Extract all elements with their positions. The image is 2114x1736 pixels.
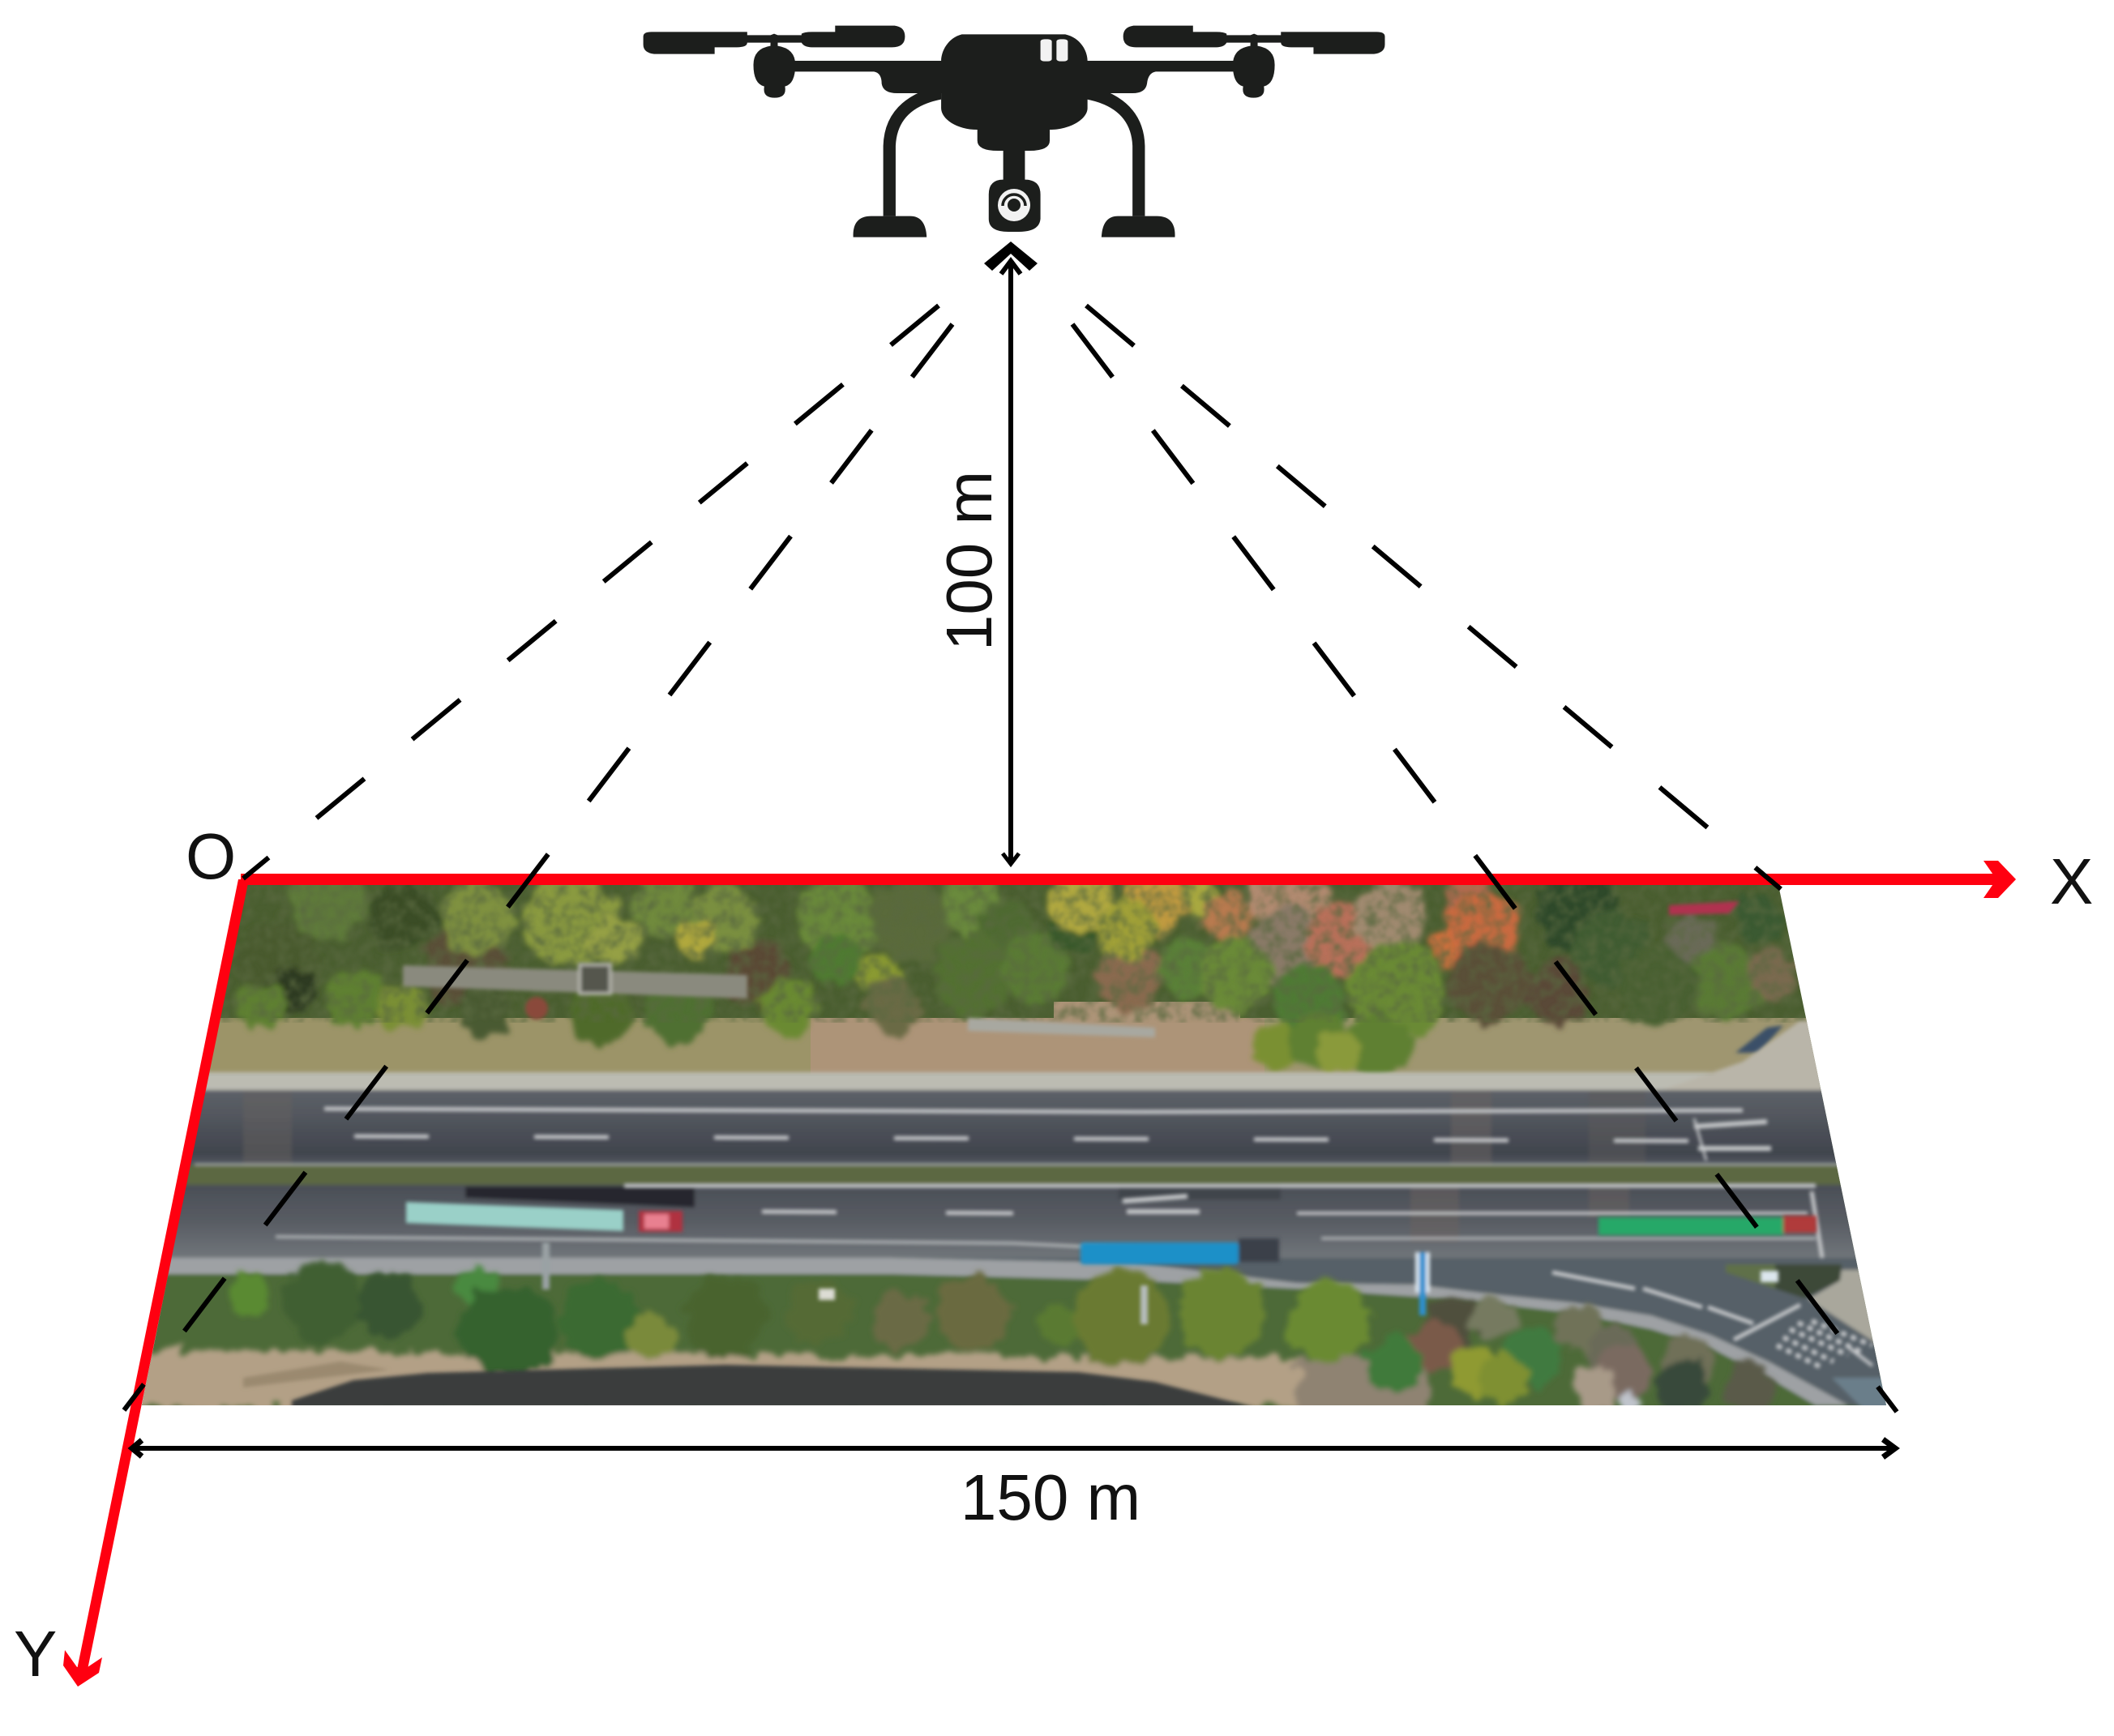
- axis label X: X: [2050, 845, 2093, 917]
- width label: 150 m: [961, 1461, 1140, 1533]
- lower vegetation, sand and water: [122, 1260, 1775, 1414]
- left rotor and leg: [644, 26, 941, 237]
- height label: 100 m: [933, 471, 1005, 651]
- height arrow: 100 m: [984, 242, 1038, 864]
- drone arms: [791, 61, 1239, 93]
- status lights: [1041, 39, 1068, 62]
- icon: drone with camera: [644, 26, 1384, 237]
- foliage texture: [220, 885, 1806, 1023]
- drone body: [941, 34, 1088, 232]
- dashed field-of-view lines: [124, 306, 1897, 1412]
- road surfaces: [122, 1021, 1905, 1410]
- lane markings: [195, 1109, 1872, 1367]
- drone silhouette: [644, 26, 1384, 237]
- right rotor and leg: [1087, 26, 1384, 237]
- axis label Y: Y: [14, 1618, 57, 1690]
- origin label O: O: [186, 820, 236, 892]
- red axis X: [241, 861, 2016, 898]
- red axis Y: [63, 879, 249, 1687]
- width arrow: 150 m: [132, 1439, 1895, 1457]
- structures and red roof: [403, 901, 1783, 1053]
- vehicles and signs: [406, 1202, 1817, 1324]
- tree canopy: [234, 885, 1799, 1075]
- camera lens: [998, 189, 1030, 221]
- aerial road photo: [122, 861, 1913, 1414]
